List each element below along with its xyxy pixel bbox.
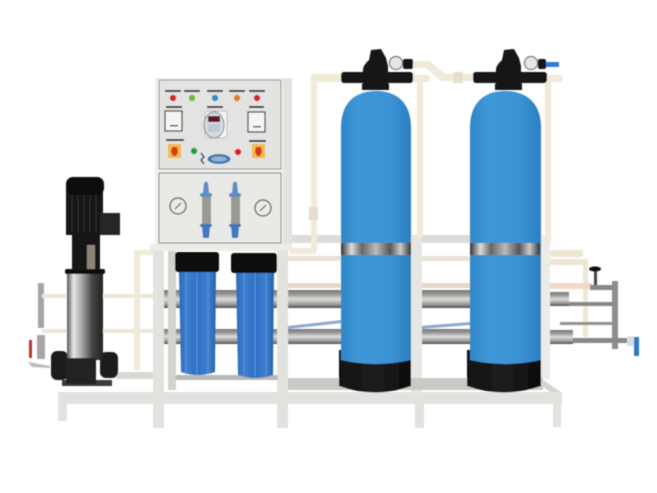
cartridge filter housings xyxy=(175,252,277,378)
right flow meter xyxy=(229,182,241,238)
multiport valve 2 xyxy=(473,49,559,90)
white inlet pipework xyxy=(290,61,563,254)
filter 2 xyxy=(231,253,277,378)
stainless steel frame xyxy=(58,236,562,428)
right rotary switch xyxy=(252,144,265,158)
right analogue meter xyxy=(248,112,265,132)
brand logo xyxy=(201,153,230,164)
lower gauge panel xyxy=(159,173,281,243)
left rotary switch xyxy=(168,144,181,158)
digital controller xyxy=(204,111,227,138)
upper control panel xyxy=(159,80,281,169)
vertical multistage pump xyxy=(51,177,120,386)
indicator lamps xyxy=(170,95,260,155)
filter 1 xyxy=(175,252,219,375)
control panel cabinet xyxy=(150,78,292,251)
right outlet manifold xyxy=(560,266,639,356)
left flow meter xyxy=(200,182,212,238)
tank 1 xyxy=(339,91,411,392)
right pressure gauge xyxy=(255,200,271,216)
tank 2 xyxy=(467,91,541,392)
left pressure gauge xyxy=(170,198,186,214)
multiport valve 1 xyxy=(341,49,413,90)
left return pipework xyxy=(28,250,156,379)
left analogue meter xyxy=(165,111,182,131)
left drain valve xyxy=(29,335,45,359)
rear pipework and steel membrane tubes xyxy=(153,235,592,344)
